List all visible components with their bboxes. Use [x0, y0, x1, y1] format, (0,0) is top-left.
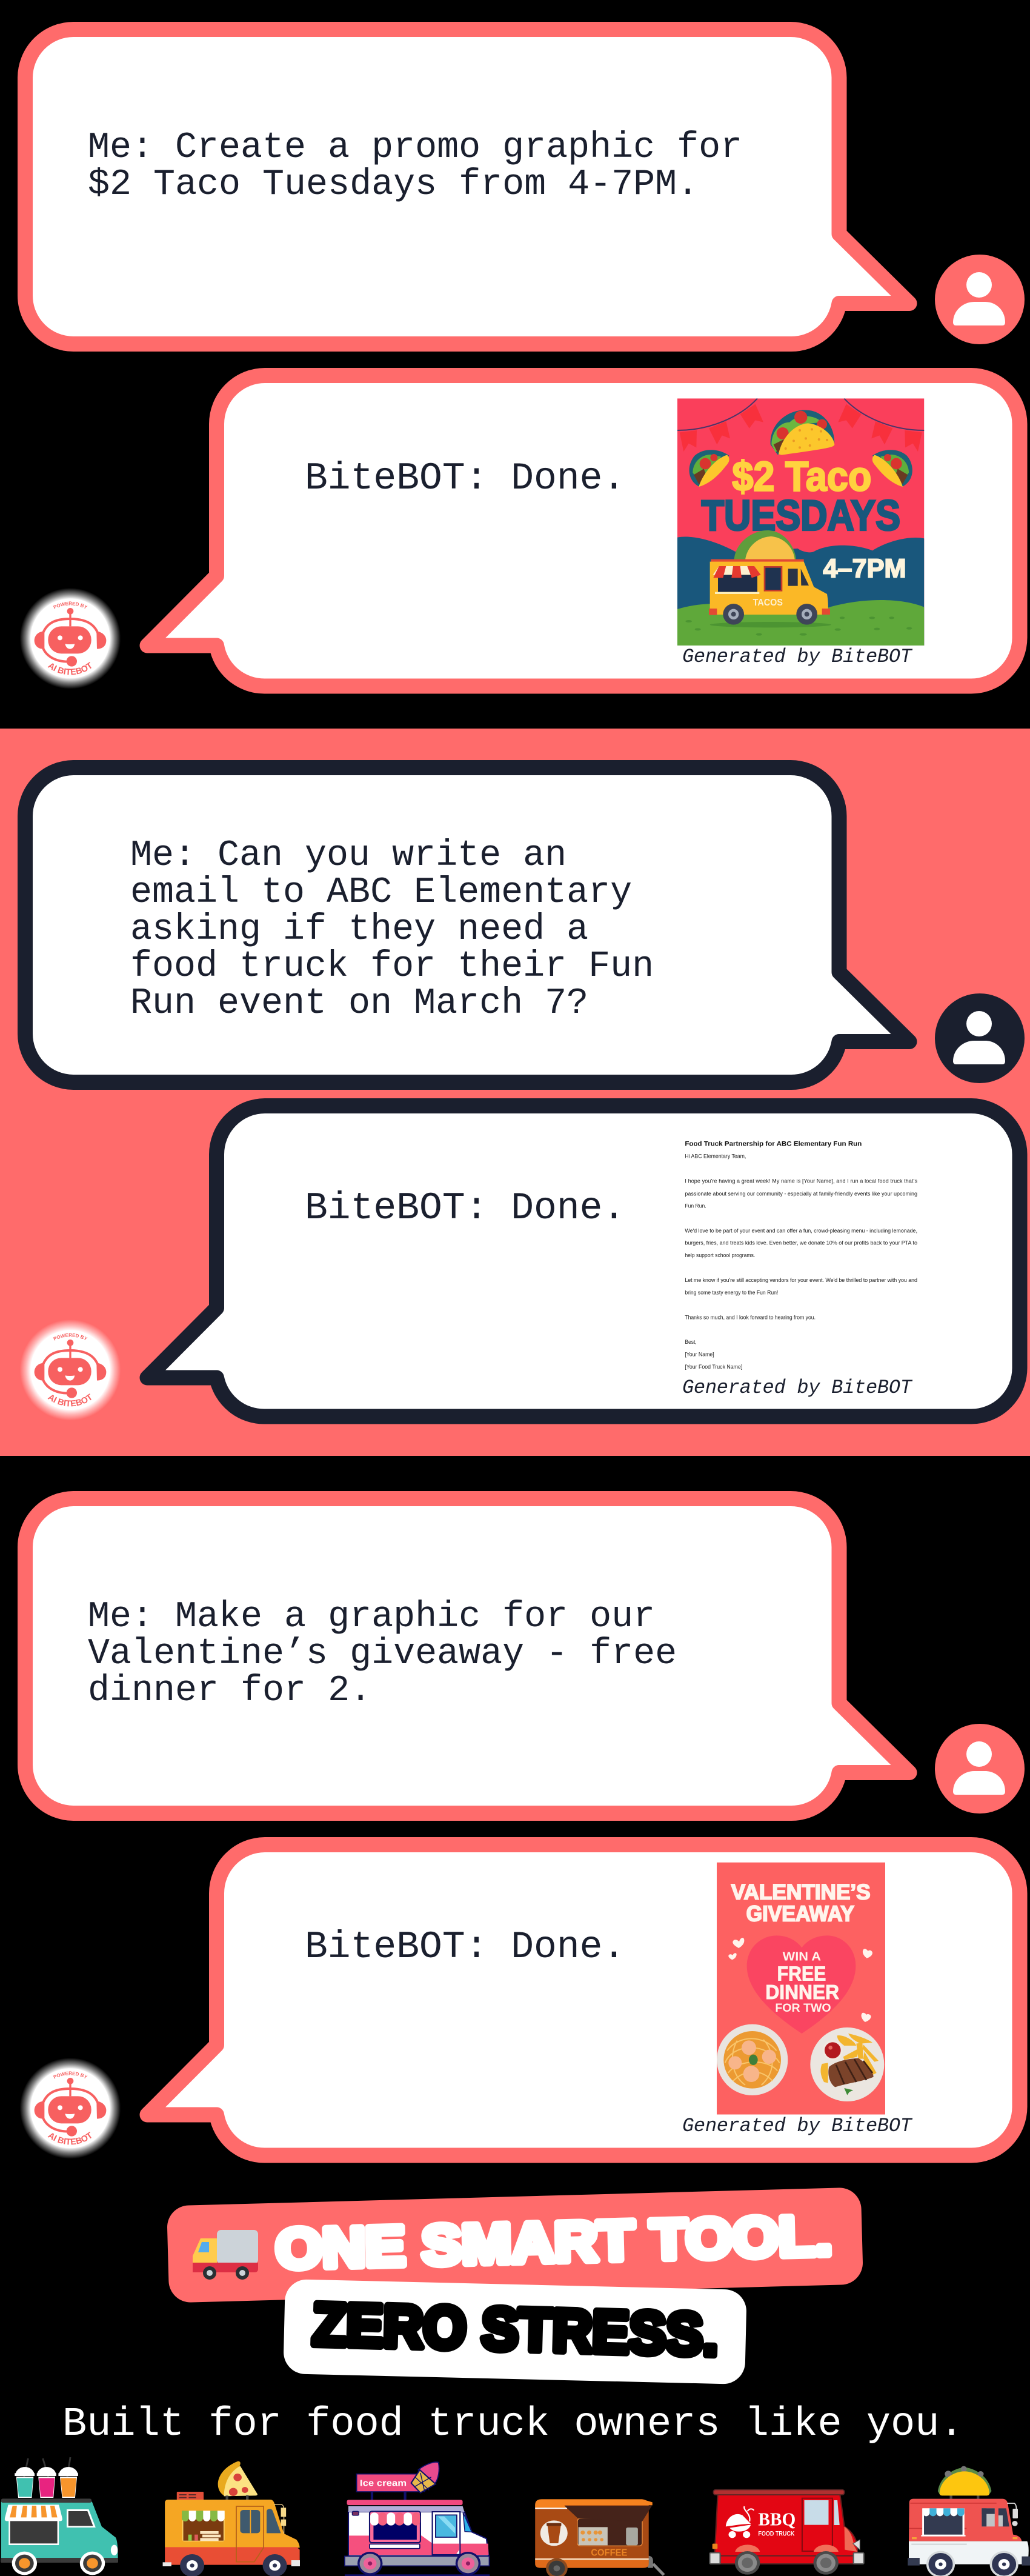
icon: drinks truck [1, 2457, 118, 2575]
document: generated email: bring some tasty energy to the Fun Run! [685, 1290, 778, 1296]
poster: $2 taco tuesdays: 4–7PM [823, 553, 906, 583]
message text: Me: Create a promo graphic for [88, 127, 742, 169]
poster: valentine's giveaway: VALENTINE’S [731, 1880, 871, 1904]
message text: email to ABC Elementary [130, 872, 632, 913]
icon: BiteBOT logo: AI BITEBOT [47, 662, 91, 675]
section: taco tuesday conversation [18, 22, 1028, 693]
icon: BBQ truck: FOOD TRUCK [758, 2530, 795, 2537]
background: coral middle band [0, 729, 1030, 1456]
section: valentine giveaway conversation [18, 1491, 1028, 2163]
bubble outline [25, 29, 909, 344]
bubble outline [25, 1498, 909, 1814]
message text: Me: Can you write an [130, 835, 566, 876]
banner background [167, 2187, 863, 2303]
banner background [283, 2279, 747, 2384]
icon: BiteBOT logo [21, 1320, 120, 1420]
poster: $2 taco tuesdays: TACOS [753, 598, 783, 608]
icon: coffee trailer: COFFEE [591, 2548, 627, 2558]
document: generated email: [Your Name] [685, 1351, 714, 1357]
poster: valentine's giveaway: DINNER [765, 1981, 839, 2004]
panel: user message bubble [25, 1498, 909, 1814]
icon: BiteBOT logo: POWERED BY [53, 1333, 87, 1341]
heading text: ONE SMART TOOL. [275, 2205, 832, 2280]
poster: valentine's giveaway: GIVEAWAY [746, 1901, 854, 1926]
poster: valentine's giveaway [717, 1863, 885, 2115]
document: generated email: Food Truck Partnership for ABC Elementary Fun Run [685, 1141, 862, 1148]
caption: Generated by BiteBOT [682, 646, 913, 668]
message text: food truck for their Fun [130, 946, 654, 987]
message text: asking if they need a [130, 909, 588, 950]
bubble outline [147, 376, 1020, 686]
message text: Me: Make a graphic for our [88, 1597, 655, 1638]
panel: BiteBOT reply bubble [147, 376, 1020, 686]
caption: Generated by BiteBOT [682, 1376, 913, 1399]
icon: user avatar [935, 1724, 1025, 1814]
reply text: BiteBOT: Done. [305, 1926, 625, 1969]
document: generated email [685, 1141, 917, 1370]
icon: BiteBOT logo [21, 2058, 120, 2158]
poster: valentine's giveaway: FOR TWO [775, 2002, 831, 2015]
poster: $2 taco tuesdays [677, 398, 924, 646]
heading text: ZERO STRESS. [311, 2291, 719, 2368]
document: generated email: passionate about serving our community - especially at family-friendly events like your upcoming [685, 1190, 917, 1196]
icon: delivery truck emoji [193, 2230, 258, 2280]
message text: dinner for 2. [88, 1670, 371, 1712]
icon: BiteBOT logo [21, 588, 120, 689]
section: school email conversation [18, 760, 1028, 1424]
icon: ice cream truck [345, 2462, 490, 2576]
icon: ice cream truck: Ice cream [360, 2478, 407, 2489]
tagline: Built for food truck owners like you. [62, 2401, 964, 2448]
poster: valentine's giveaway: WIN A [783, 1950, 821, 1964]
panel: BiteBOT reply bubble [147, 1845, 1020, 2155]
bubble outline [147, 1845, 1020, 2155]
icon: BiteBOT logo: POWERED BY [53, 2072, 87, 2079]
document: generated email: burgers, fries, and treats kids love. Even better, we donate 10% of our profits back to your PTA to [685, 1240, 917, 1246]
icon: BiteBOT logo: AI BITEBOT [47, 1393, 91, 1406]
icon: user avatar [935, 255, 1025, 344]
document: generated email: Thanks so much, and I look forward to hearing from you. [685, 1314, 816, 1320]
document: generated email: Best, [685, 1339, 697, 1345]
caption: Generated by BiteBOT [682, 2115, 913, 2137]
food truck row [1, 2457, 1030, 2576]
panel: user message bubble [25, 767, 909, 1083]
icon: BBQ truck: BBQ [758, 2509, 796, 2529]
reply text: BiteBOT: Done. [305, 457, 625, 500]
bubble outline [147, 1106, 1020, 1416]
icon: BiteBOT logo: AI BITEBOT [47, 2132, 91, 2144]
message text: Run event on March 7? [130, 983, 588, 1024]
heading: zero stress banner [283, 2279, 747, 2384]
poster: $2 taco tuesdays: $2 Taco [732, 453, 871, 499]
document: generated email: [Your Food Truck Name] [685, 1364, 742, 1370]
icon: user avatar [935, 993, 1025, 1083]
message text: Valentine’s giveaway - free [88, 1633, 677, 1675]
icon: taco truck [908, 2466, 1030, 2576]
document: generated email: I hope you're having a great week! My name is [Your Name], and I run a local food truck that's [685, 1178, 917, 1184]
message text: $2 Taco Tuesdays from 4-7PM. [88, 164, 699, 205]
poster: $2 taco tuesdays: TUESDAYS [702, 491, 900, 539]
document: generated email: We'd love to be part of your event and can offer a fun, crowd-pleasing menu - including lemonade, [685, 1227, 917, 1233]
bubble outline [25, 767, 909, 1083]
icon: BiteBOT logo: POWERED BY [53, 601, 87, 609]
poster: valentine's giveaway: FREE [777, 1963, 826, 1985]
panel: BiteBOT reply bubble [147, 1106, 1020, 1416]
document: generated email: help support school programs. [685, 1252, 755, 1258]
document: generated email: Let me know if you're still accepting vendors for your event. We'd be thrilled to partner with you and [685, 1277, 917, 1283]
reply text: BiteBOT: Done. [305, 1187, 625, 1230]
icon: BBQ truck [709, 2490, 864, 2575]
heading: one smart tool banner [167, 2187, 863, 2303]
icon: coffee trailer [535, 2499, 664, 2576]
document: generated email: Hi ABC Elementary Team, [685, 1153, 746, 1160]
icon: pizza truck [163, 2461, 300, 2576]
panel: user message bubble [25, 29, 909, 344]
document: generated email: Fun Run. [685, 1203, 706, 1209]
